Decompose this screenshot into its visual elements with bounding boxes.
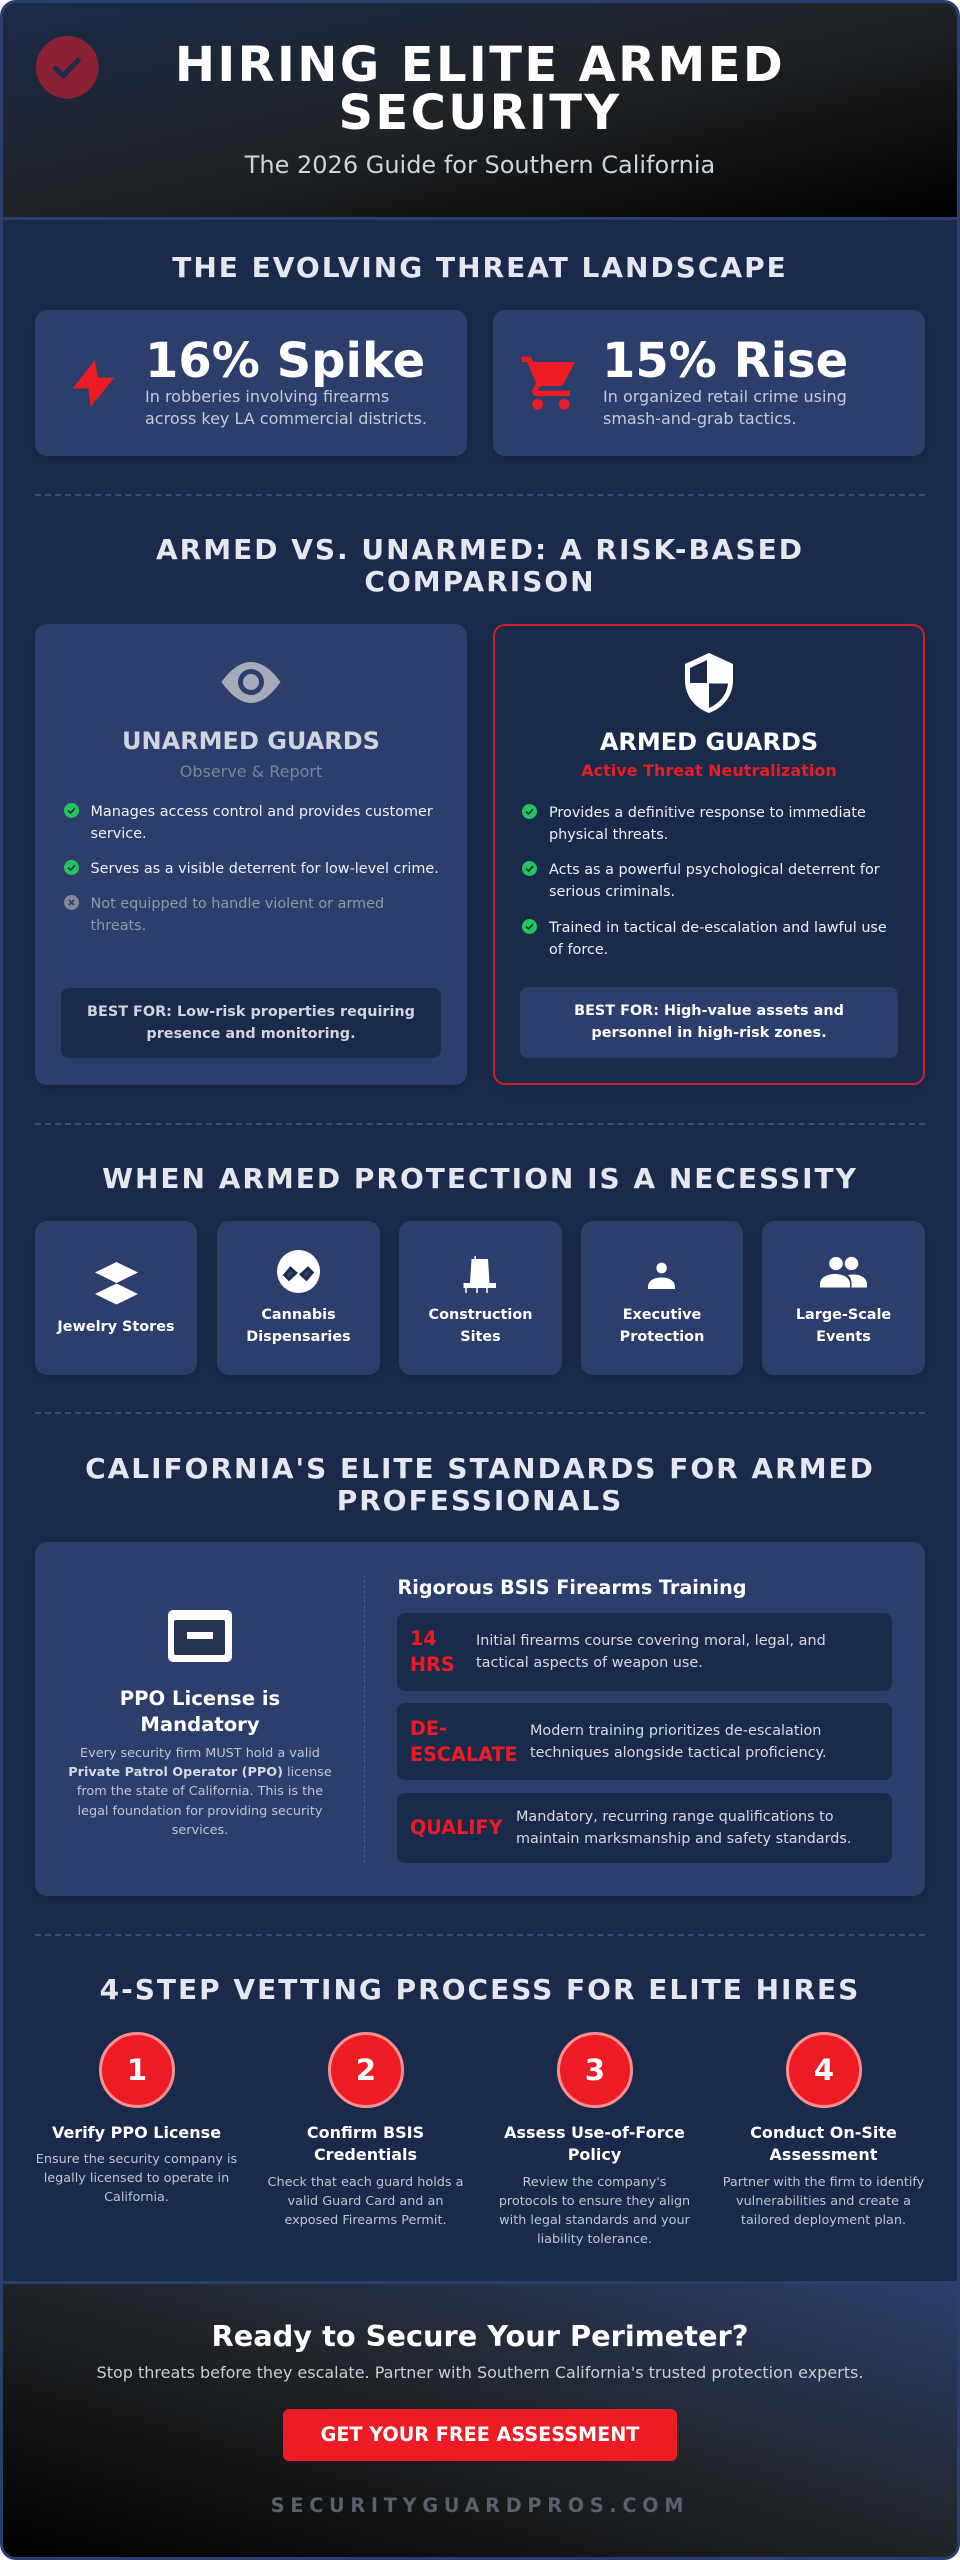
label: DE- xyxy=(410,1717,447,1740)
icon: logo check badge xyxy=(36,36,99,99)
panel: large-scale events xyxy=(762,1221,925,1375)
label xyxy=(620,1307,704,1345)
icon: group of people xyxy=(820,1256,867,1288)
list item 2 xyxy=(522,861,880,900)
list item 3 xyxy=(522,919,887,958)
label xyxy=(429,1307,532,1345)
list item 2: Serves as a visible deterrent for low-level crime. xyxy=(90,861,439,877)
list item 1: Manages access control and provides customer xyxy=(90,804,433,820)
panel: armed guards xyxy=(493,624,925,1085)
title: HIRING ELITE ARMED xyxy=(175,37,785,93)
step title: Verify PPO License xyxy=(52,2123,221,2142)
label: Cannabis xyxy=(261,1307,336,1323)
description: Initial firearms course covering moral, legal, and xyxy=(476,1633,826,1649)
step title: Assess Use-of-Force xyxy=(504,2123,685,2142)
step number xyxy=(557,2032,633,2108)
list item 3: Not equipped to handle violent or armed xyxy=(90,896,384,912)
best for box xyxy=(520,987,898,1058)
description xyxy=(530,1723,827,1761)
license text: Every security firm MUST hold a valid xyxy=(80,1746,320,1761)
heading: armed vs unarmed: COMPARISON xyxy=(364,565,596,598)
step text: vulnerabilities and create a xyxy=(736,2194,911,2209)
step text: exposed Firearms Permit. xyxy=(284,2213,447,2228)
license heading xyxy=(120,1687,280,1736)
label xyxy=(410,1627,455,1676)
step title xyxy=(307,2123,424,2164)
training item: 14 hrs xyxy=(397,1613,892,1691)
step number xyxy=(786,2032,862,2108)
step text: valid Guard Card and an xyxy=(288,2194,443,2209)
license text: from the state of California. This is the xyxy=(77,1784,323,1799)
title xyxy=(175,37,785,141)
panel: stat 16% spike xyxy=(35,310,467,456)
step title: Assessment xyxy=(770,2145,877,2164)
label: Protection xyxy=(620,1329,704,1345)
label: Large-Scale xyxy=(796,1307,891,1323)
description xyxy=(516,1809,852,1847)
label xyxy=(796,1307,891,1345)
list item 3: threats. xyxy=(90,918,146,934)
list item 3: Trained in tactical de-escalation and lawful use xyxy=(549,920,887,936)
footer heading: Ready to Secure Your Perimeter? xyxy=(212,2319,748,2353)
list item 1 xyxy=(64,803,433,842)
license text: legal foundation for providing security xyxy=(78,1804,322,1819)
stat description: smash-and-grab tactics. xyxy=(603,409,796,428)
stat value: 16% Spike xyxy=(145,333,425,389)
icon: lightning bolt xyxy=(72,360,114,406)
list item 3: of force. xyxy=(549,942,608,958)
label: Dispensaries xyxy=(246,1329,351,1345)
list item 1: physical threats. xyxy=(549,827,668,843)
step text xyxy=(36,2152,237,2205)
step 4 xyxy=(722,2032,925,2257)
step text: Ensure the security company is xyxy=(36,2152,237,2167)
label: 14 xyxy=(410,1627,437,1650)
step text: protocols to ensure they align xyxy=(499,2194,690,2209)
panel: cannabis dispensaries xyxy=(217,1221,380,1375)
step title xyxy=(722,2122,925,2167)
list item 2: Acts as a powerful psychological deterrent for xyxy=(549,862,880,878)
step text: California. xyxy=(104,2190,169,2205)
button: GET YOUR FREE ASSESSMENT xyxy=(321,2423,639,2446)
best for box xyxy=(61,988,441,1058)
description: Mandatory, recurring range qualifications to xyxy=(516,1809,834,1825)
step text: Partner with the firm to identify xyxy=(723,2174,924,2190)
step title: Credentials xyxy=(314,2145,417,2164)
step 2 xyxy=(268,2032,463,2228)
subtitle: The 2026 Guide for Southern California xyxy=(245,151,715,179)
step title: Conduct On-Site xyxy=(750,2123,897,2142)
panel: standards xyxy=(35,1542,925,1896)
label: Events xyxy=(816,1329,871,1345)
card title: UNARMED GUARDS xyxy=(122,727,380,755)
step text: tailored deployment plan. xyxy=(741,2213,906,2228)
best for box: BEST FOR: Low-risk properties requiring xyxy=(87,1004,415,1020)
list item 2: serious criminals. xyxy=(549,884,675,900)
license heading: Mandatory xyxy=(140,1713,260,1736)
panel: jewelry stores xyxy=(35,1221,197,1375)
step number: 3 xyxy=(585,2053,605,2087)
step 1 xyxy=(36,2032,237,2205)
heading: armed vs unarmed xyxy=(156,533,804,598)
label: Jewelry Stores xyxy=(57,1319,175,1335)
step text xyxy=(722,2172,925,2230)
header band xyxy=(0,0,960,220)
license heading: PPO License is xyxy=(120,1687,280,1710)
step text: with legal standards and your xyxy=(499,2213,690,2228)
step text xyxy=(268,2174,463,2228)
heading: necessity: WHEN ARMED PROTECTION IS A NECESSITY xyxy=(102,1162,858,1195)
footer text: Stop threats before they escalate. Partner with Southern California's trusted protection experts. xyxy=(97,2363,863,2382)
icon: person xyxy=(648,1262,675,1289)
panel: stat 15% rise xyxy=(493,310,925,456)
button xyxy=(283,2409,677,2461)
heading: vetting process: 4-STEP VETTING PROCESS FOR ELITE HIRES xyxy=(100,1973,860,2006)
card subtitle: Active Threat Neutralization xyxy=(581,761,837,780)
best for box: presence and monitoring. xyxy=(146,1026,356,1042)
training item: qualify xyxy=(397,1793,892,1863)
license text: services. xyxy=(172,1823,228,1838)
footer band xyxy=(0,2281,960,2560)
step number: 4 xyxy=(814,2053,834,2087)
list item 1 xyxy=(522,804,866,843)
heading: california standards xyxy=(85,1452,875,1517)
step title xyxy=(504,2123,685,2164)
step text: Check that each guard holds a xyxy=(268,2174,463,2190)
best for box: personnel in high-risk zones. xyxy=(591,1025,827,1041)
list item 1: Provides a definitive response to immediate xyxy=(549,805,866,821)
list item 1: service. xyxy=(90,826,147,842)
icon: eye xyxy=(222,662,280,703)
label xyxy=(246,1307,351,1345)
stat description xyxy=(145,387,427,428)
label: Construction xyxy=(429,1307,532,1323)
step number: 2 xyxy=(356,2053,376,2087)
label: HRS xyxy=(410,1653,455,1676)
license text: Private Patrol Operator (PPO) license xyxy=(68,1765,332,1780)
step number: 1 xyxy=(127,2053,147,2087)
panel: unarmed guards xyxy=(35,624,467,1085)
heading: california standards: CALIFORNIA'S ELITE STANDARDS FOR ARMED xyxy=(85,1452,875,1485)
label: Sites xyxy=(460,1329,501,1345)
icon: construction site xyxy=(464,1256,496,1293)
icon: shield xyxy=(685,653,733,713)
heading: california standards: PROFESSIONALS xyxy=(337,1484,623,1517)
step 3 xyxy=(499,2032,690,2247)
heading: threat landscape: THE EVOLVING THREAT LANDSCAPE xyxy=(172,251,788,284)
step number xyxy=(328,2032,404,2108)
stat description: In organized retail crime using xyxy=(603,387,847,406)
stat description: In robberies involving firearms xyxy=(145,387,389,406)
label: QUALIFY xyxy=(410,1816,503,1839)
step number xyxy=(99,2032,175,2108)
icon: cannabis badge xyxy=(277,1250,320,1293)
training item: de-escalate xyxy=(397,1703,892,1780)
website: SECURITYGUARDPROS.COM xyxy=(271,2494,689,2517)
step text: liability tolerance. xyxy=(537,2232,652,2247)
stat description xyxy=(603,387,847,428)
icon: diamonds xyxy=(95,1262,138,1304)
icon: shopping cart xyxy=(522,356,575,410)
description: maintain marksmanship and safety standards. xyxy=(516,1831,852,1847)
training heading: Rigorous BSIS Firearms Training xyxy=(398,1576,747,1599)
label: ESCALATE xyxy=(410,1743,518,1766)
step text: Review the company's xyxy=(523,2174,666,2190)
card subtitle: Observe & Report xyxy=(180,762,322,781)
description: Modern training prioritizes de-escalation xyxy=(530,1723,821,1739)
description: tactical aspects of weapon use. xyxy=(476,1655,703,1671)
best for box: BEST FOR: High-value assets and xyxy=(574,1003,844,1019)
panel: construction sites xyxy=(399,1221,562,1375)
title: SECURITY xyxy=(338,85,622,141)
list item 3 xyxy=(64,895,384,934)
step title: Policy xyxy=(568,2145,621,2164)
step text: legally licensed to operate in xyxy=(44,2171,229,2186)
step title: Confirm BSIS xyxy=(307,2123,424,2142)
heading: armed vs unarmed: ARMED VS. UNARMED: A RISK-BASED xyxy=(156,533,804,566)
step text xyxy=(493,2172,696,2249)
card title: ARMED GUARDS xyxy=(600,728,818,756)
description: techniques alongside tactical proficiency. xyxy=(530,1745,827,1761)
icon: license card xyxy=(168,1610,232,1662)
stat description: across key LA commercial districts. xyxy=(145,409,427,428)
label xyxy=(410,1717,518,1766)
license text xyxy=(68,1746,332,1838)
description xyxy=(476,1633,826,1671)
panel: executive protection xyxy=(581,1221,743,1375)
stat value: 15% Rise xyxy=(602,333,848,389)
label: Executive xyxy=(623,1307,701,1323)
